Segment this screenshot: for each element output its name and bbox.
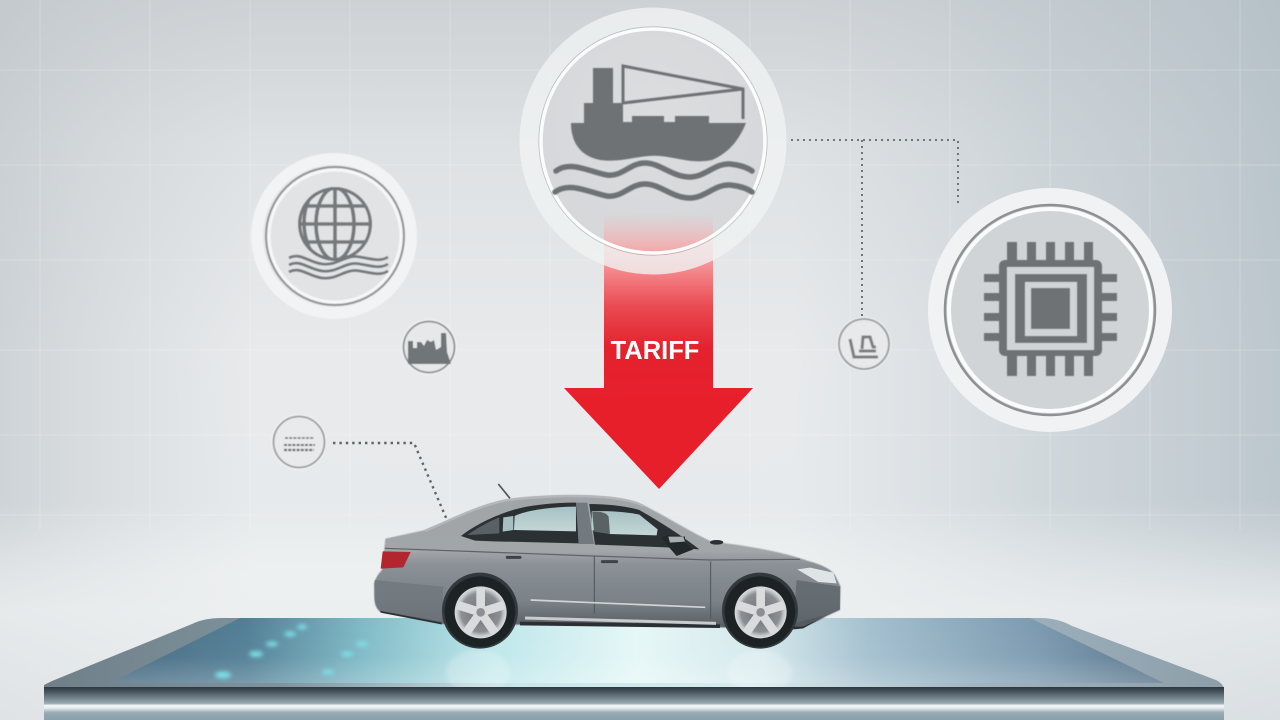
mirror cap: [668, 537, 685, 543]
roof highlight: [425, 496, 643, 531]
rear window frame: [461, 503, 579, 543]
ship glyph: [555, 66, 752, 198]
chip glyph: [984, 242, 1117, 376]
rear small glass: [503, 516, 513, 532]
icon: factory circle: [401, 319, 457, 375]
dotted connector: ship to chip and forklift: [791, 140, 958, 316]
tariff arrow: [564, 213, 753, 489]
car: [374, 484, 841, 649]
dotted connector: label to car: [333, 443, 447, 520]
arrow label: TARIFF: [611, 337, 699, 365]
seat headrest: [592, 512, 610, 534]
glowing screen dots: [215, 624, 368, 678]
icon: globe circle: [257, 159, 411, 313]
rear bumper shading: [375, 580, 443, 623]
door trim: [531, 600, 705, 607]
hood vent: [710, 540, 723, 545]
front bumper shading: [793, 580, 840, 627]
icon: forklift circle: [837, 317, 891, 371]
antenna: [498, 484, 510, 498]
rear quarter glass: [467, 517, 499, 535]
tail light: [381, 551, 411, 569]
rear wheel: [442, 573, 518, 649]
icon: chip circle: [938, 198, 1162, 422]
screen lower sheen: [110, 618, 1164, 683]
sill highlight: [525, 618, 716, 623]
side mirror: [662, 535, 693, 556]
globe waves: [289, 256, 388, 278]
car reflection: [446, 650, 792, 694]
front door glass: [592, 511, 658, 535]
front window frame: [589, 504, 699, 549]
tablet screen: [110, 618, 1164, 683]
door handles: [507, 557, 617, 562]
tablet platform: [44, 618, 1224, 720]
globe glyph: [298, 186, 372, 262]
front wheel: [722, 573, 798, 649]
icon: text label circle: [271, 414, 327, 470]
shoulder line: [385, 548, 800, 560]
door pillar: [576, 503, 594, 544]
tablet top bezel: [44, 618, 1224, 690]
headlight: [797, 568, 837, 583]
car body: [374, 495, 841, 629]
lower sill shadow: [380, 611, 827, 629]
tablet side edge: [44, 687, 1224, 720]
icon: ship circle: [529, 17, 777, 489]
rear door glass: [514, 507, 576, 531]
door seams: [594, 556, 711, 618]
